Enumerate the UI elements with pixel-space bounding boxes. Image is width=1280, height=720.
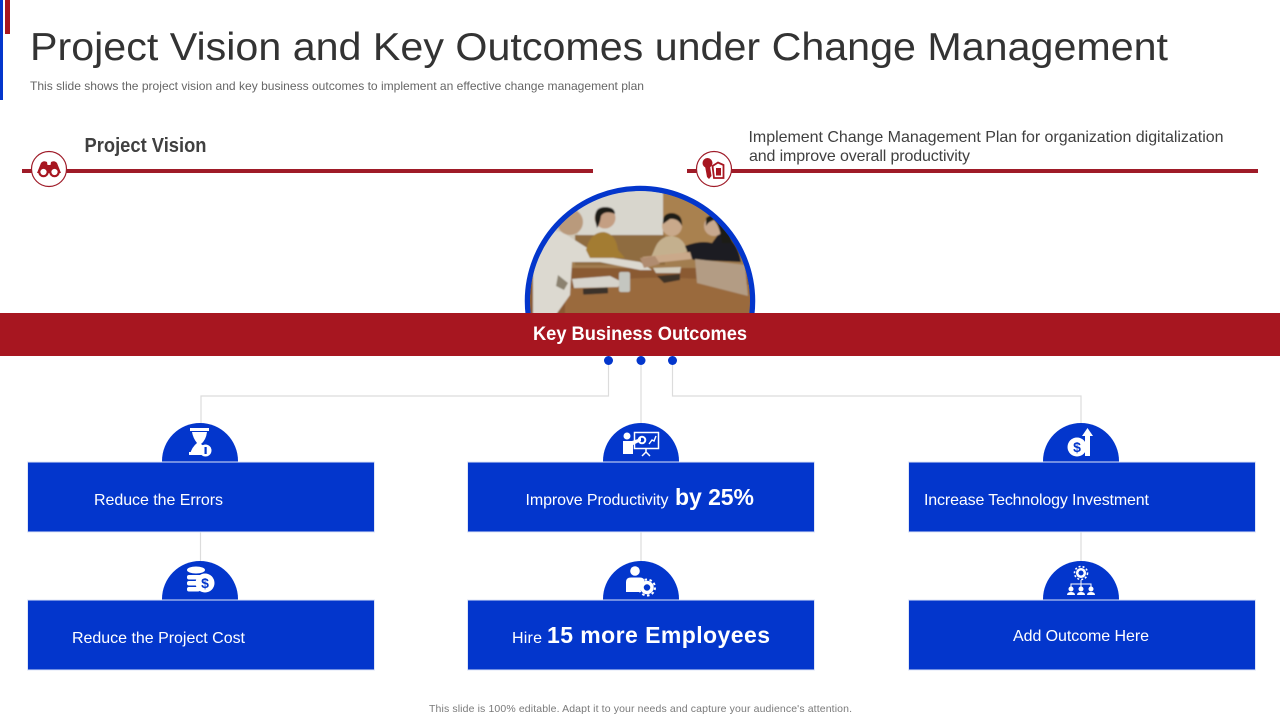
icon: dollar with up arrow dome xyxy=(1043,423,1119,499)
text: vision statement: Implement Change Management Plan for organization digitalization xyxy=(748,129,1224,146)
icon: key and tag xyxy=(696,152,732,186)
heading: project vision: Project Vision xyxy=(84,135,206,157)
card: increase technology investment: Increase Technology Investment xyxy=(924,492,1150,509)
card: improve productivity xyxy=(468,423,814,532)
card: improve productivity: by 25% xyxy=(675,484,754,510)
card: reduce the errors: Reduce the Errors xyxy=(94,492,223,509)
banner: key business outcomes: Key Business Outcomes xyxy=(533,324,747,345)
connector lines xyxy=(200,360,1081,562)
icon: person with gear dome xyxy=(603,561,679,637)
card: hire more employees xyxy=(468,561,814,670)
icon: coins dome: $ xyxy=(201,575,209,591)
icon: dollar with up arrow dome: $ xyxy=(1073,439,1081,455)
card: improve productivity: Improve Productivity xyxy=(526,492,668,509)
icon: presenter dome xyxy=(603,423,679,499)
banner: key business outcomes xyxy=(0,313,1280,356)
card: reduce the project cost: Reduce the Project Cost xyxy=(72,630,246,647)
subtitle: This slide shows the project vision and key business outcomes to implement an effective change management plan xyxy=(30,79,644,93)
panel: project vision header xyxy=(22,135,593,173)
card: hire more employees: 15 more Employees xyxy=(547,622,770,648)
footer note: This slide is 100% editable. Adapt it to your needs and capture your audience's attention. xyxy=(429,703,852,715)
card: add outcome here xyxy=(908,561,1256,670)
icon: team hierarchy dome xyxy=(1043,561,1119,637)
icon: coins dome xyxy=(162,561,238,637)
card: hire more employees: Hire xyxy=(512,630,542,647)
card: add outcome here: Add Outcome Here xyxy=(1013,628,1149,645)
text: vision statement: and improve overall productivity xyxy=(749,148,970,165)
panel: vision statement xyxy=(687,129,1258,173)
accent bars xyxy=(0,0,10,100)
card: increase technology investment xyxy=(908,423,1256,532)
card: reduce the errors xyxy=(28,423,374,532)
photo: team meeting in circular frame xyxy=(524,186,756,313)
connector dots xyxy=(604,356,677,365)
text: vision statement xyxy=(748,129,1224,165)
icon: binoculars xyxy=(32,152,66,186)
icon: hourglass dome xyxy=(162,423,238,499)
card: reduce the project cost xyxy=(28,561,374,670)
title: Project Vision and Key Outcomes under Change Management xyxy=(30,26,1168,69)
